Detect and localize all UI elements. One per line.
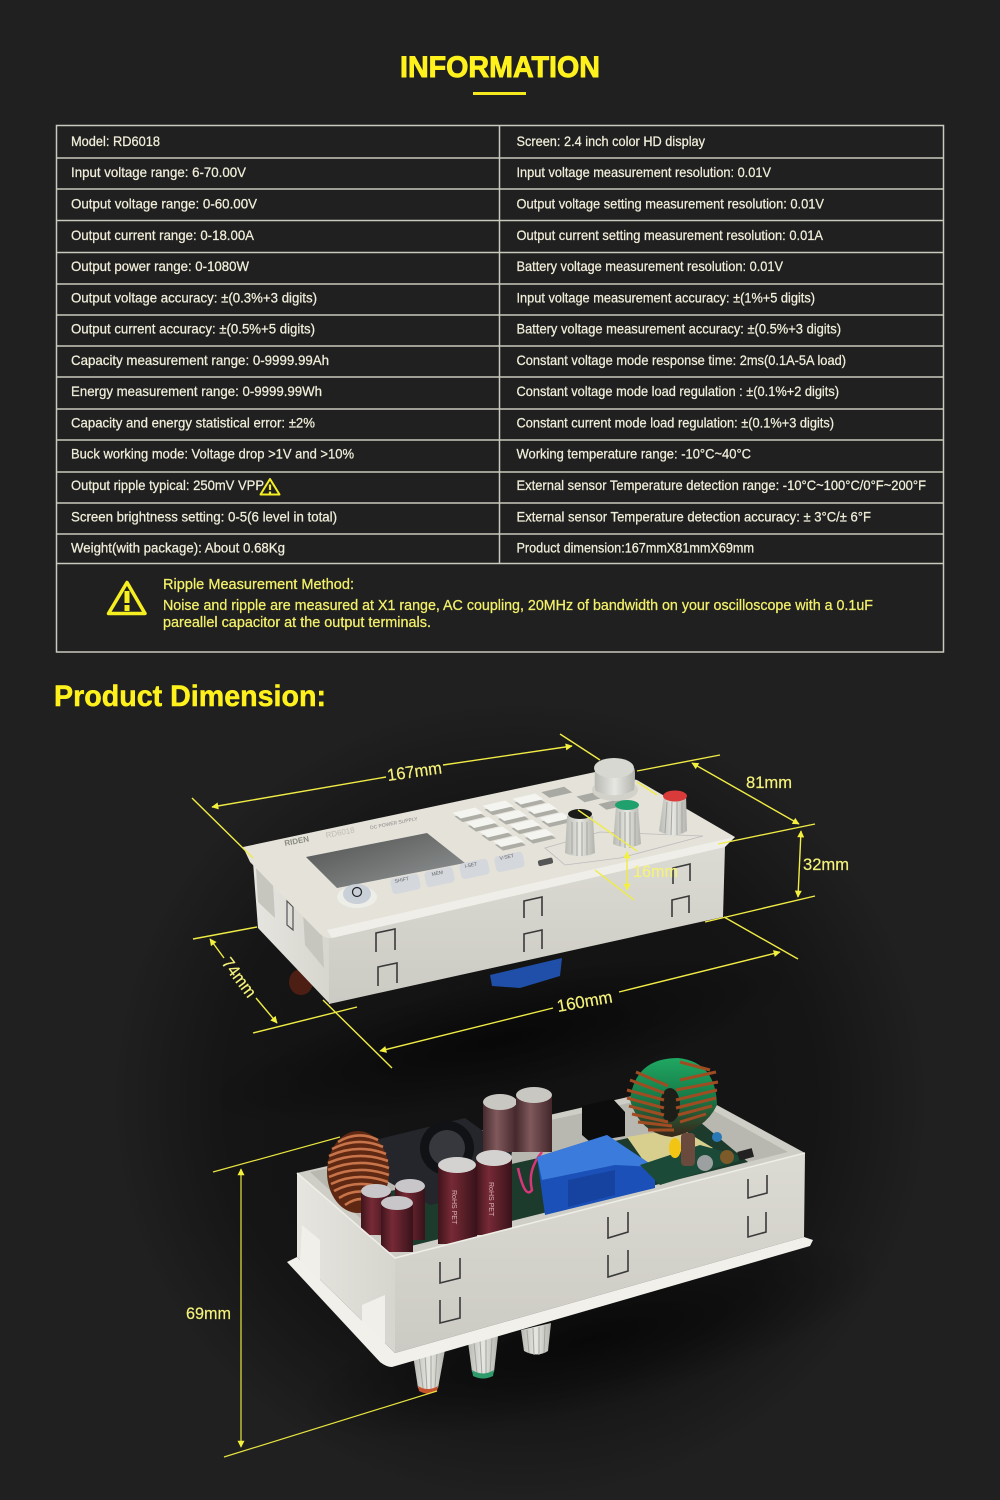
label: 74mm: 74mm [218,954,260,1001]
left column specs: Energy measurement range: 0-9999.99Wh [71,383,322,399]
label: 160mm: 160mm [555,988,614,1016]
yellow capacitor and small parts [640,1132,754,1185]
brand text: RD6018 [325,825,356,840]
left column specs: Input voltage range: 6-70.00V [71,164,247,180]
inner rim [297,1153,805,1258]
green toroid [627,1058,718,1137]
icon: large warning triangle [108,582,145,614]
front wall [395,1153,805,1353]
pink wires [518,1152,542,1192]
front wall [329,846,725,1004]
slots [440,1175,767,1323]
function buttons [390,851,525,895]
left column specs: Screen brightness setting: 0-5(6 level in total) [71,508,337,524]
left column specs: Buck working mode: Voltage drop >1V and >10% [71,446,354,462]
label: 81mm: 81mm [746,773,792,792]
right column specs: Output voltage setting measurement resolution: 0.01V [516,196,825,212]
back capacitors [483,1087,552,1152]
right column specs: Constant voltage mode response time: 2ms(0.1A-5A load) [516,352,846,368]
terminal panel outline [545,832,703,865]
product photo: open unit showing internals [287,1058,813,1394]
left column specs: Model: RD6018 [71,133,160,149]
left wall [253,862,331,1003]
left wall [297,1173,395,1353]
large capacitors: RoHS PET [487,1182,494,1217]
title underline [473,92,526,95]
left column specs: Output voltage range: 0-60.00V [71,196,258,212]
icon: small warning triangle [260,479,280,494]
right column specs: Input voltage measurement resolution: 0.01V [516,164,772,180]
ripple measurement note [163,577,873,631]
large capacitors: RoHS PET [450,1190,457,1225]
product photo: assembled unit, top view: MEM [431,870,444,878]
arrow: 160mm [380,952,780,1051]
right column specs: Output current setting measurement resolution: 0.01A [516,227,824,243]
dimension lines: assembled unit [192,734,815,1068]
right column specs: External sensor Temperature detection accuracy: ± 3°C/± 6°F [516,508,871,524]
arrow: 81mm [692,763,799,824]
right column specs: Battery voltage measurement accuracy: ±(0.5%+3 digits) [516,320,841,336]
brand text: RIDEN [284,834,310,848]
product photo: assembled unit, top view: SHIFT [394,876,410,885]
dimension lines: open unit [213,1137,437,1457]
left column specs: Capacity measurement range: 0-9999.99Ah [71,352,329,368]
blue relay [537,1135,655,1215]
label: 16mm: 16mm [633,862,678,881]
big rotary knob [592,758,638,801]
ripple measurement note: Noise and ripple are measured at X1 range, AC coupling, 20MHz of bandwidth on your oscilloscope with a 0.1uF [163,598,873,614]
slots [376,864,690,986]
label: 32mm: 32mm [803,855,849,874]
left column specs: Output ripple typical: 250mV VPP [71,477,264,493]
large capacitors [438,1150,512,1244]
left column specs: Weight(with package): About 0.68Kg [71,540,285,556]
left column specs: Output current range: 0-18.00A [71,227,255,243]
arrow: 16mm [626,852,628,890]
right column specs: Constant voltage mode load regulation : ±(0.1%+2 digits) [516,383,839,399]
right column specs [516,133,926,556]
fan [375,1118,512,1205]
label: 167mm: 167mm [386,758,443,785]
small capacitors [361,1179,425,1252]
arrow: 32mm [798,831,801,897]
product photo: assembled unit, top view: V-SET [499,853,515,862]
top plate [243,771,735,938]
back wall and interior [297,1085,805,1258]
left column specs [71,133,354,556]
right column specs: Working temperature range: -10°C~40°C [516,446,751,462]
green terminal [613,800,641,848]
red terminal [659,790,687,836]
left column specs: Output power range: 0-1080W [71,258,250,274]
right column specs: Constant current mode load regulation: ±(0.1%+3 digits) [516,414,834,430]
label: 69mm: 69mm [186,1304,231,1323]
blue terminal and coil below unit [289,958,562,995]
left column specs: Output voltage accuracy: ±(0.3%+3 digits) [71,290,317,306]
knobs beneath [413,1323,551,1394]
left column specs: Output current accuracy: ±(0.5%+5 digits) [71,320,315,336]
black terminal [565,809,595,856]
title: INFORMATION [400,51,600,84]
right column specs: Product dimension:167mmX81mmX69mm [516,540,754,556]
left column specs: Capacity and energy statistical error: ±2% [71,414,315,430]
power button [337,884,377,908]
ripple measurement note: pareallel capacitor at the output terminals. [163,615,431,631]
specification table [56,125,944,652]
display screen [306,833,465,888]
brand text: DC POWER SUPPLY [370,816,419,831]
brand text [284,813,419,848]
product photo: assembled unit, top view: I-SET [464,861,478,870]
ripple measurement note: Ripple Measurement Method: [163,577,354,593]
right column specs: Battery voltage measurement resolution: 0.01V [516,258,784,274]
bottom lip [287,1237,813,1367]
right column specs: Screen: 2.4 inch color HD display [516,133,705,149]
arrow: 69mm [240,1169,242,1447]
right column specs: External sensor Temperature detection range: -10°C~100°C/0°F~200°F [516,477,926,493]
arrow: 74mm [210,939,277,1023]
right column specs: Input voltage measurement accuracy: ±(1%+5 digits) [516,290,815,306]
product photo: assembled unit, top view [243,758,735,1004]
arrow: 167mm [212,746,572,807]
usb port [538,857,553,866]
heading: product dimension: Product Dimension: [54,680,326,713]
pale pcb under toroid [627,1128,713,1170]
keypad [450,780,647,851]
copper toroid [327,1131,389,1213]
black connector [582,1099,625,1142]
